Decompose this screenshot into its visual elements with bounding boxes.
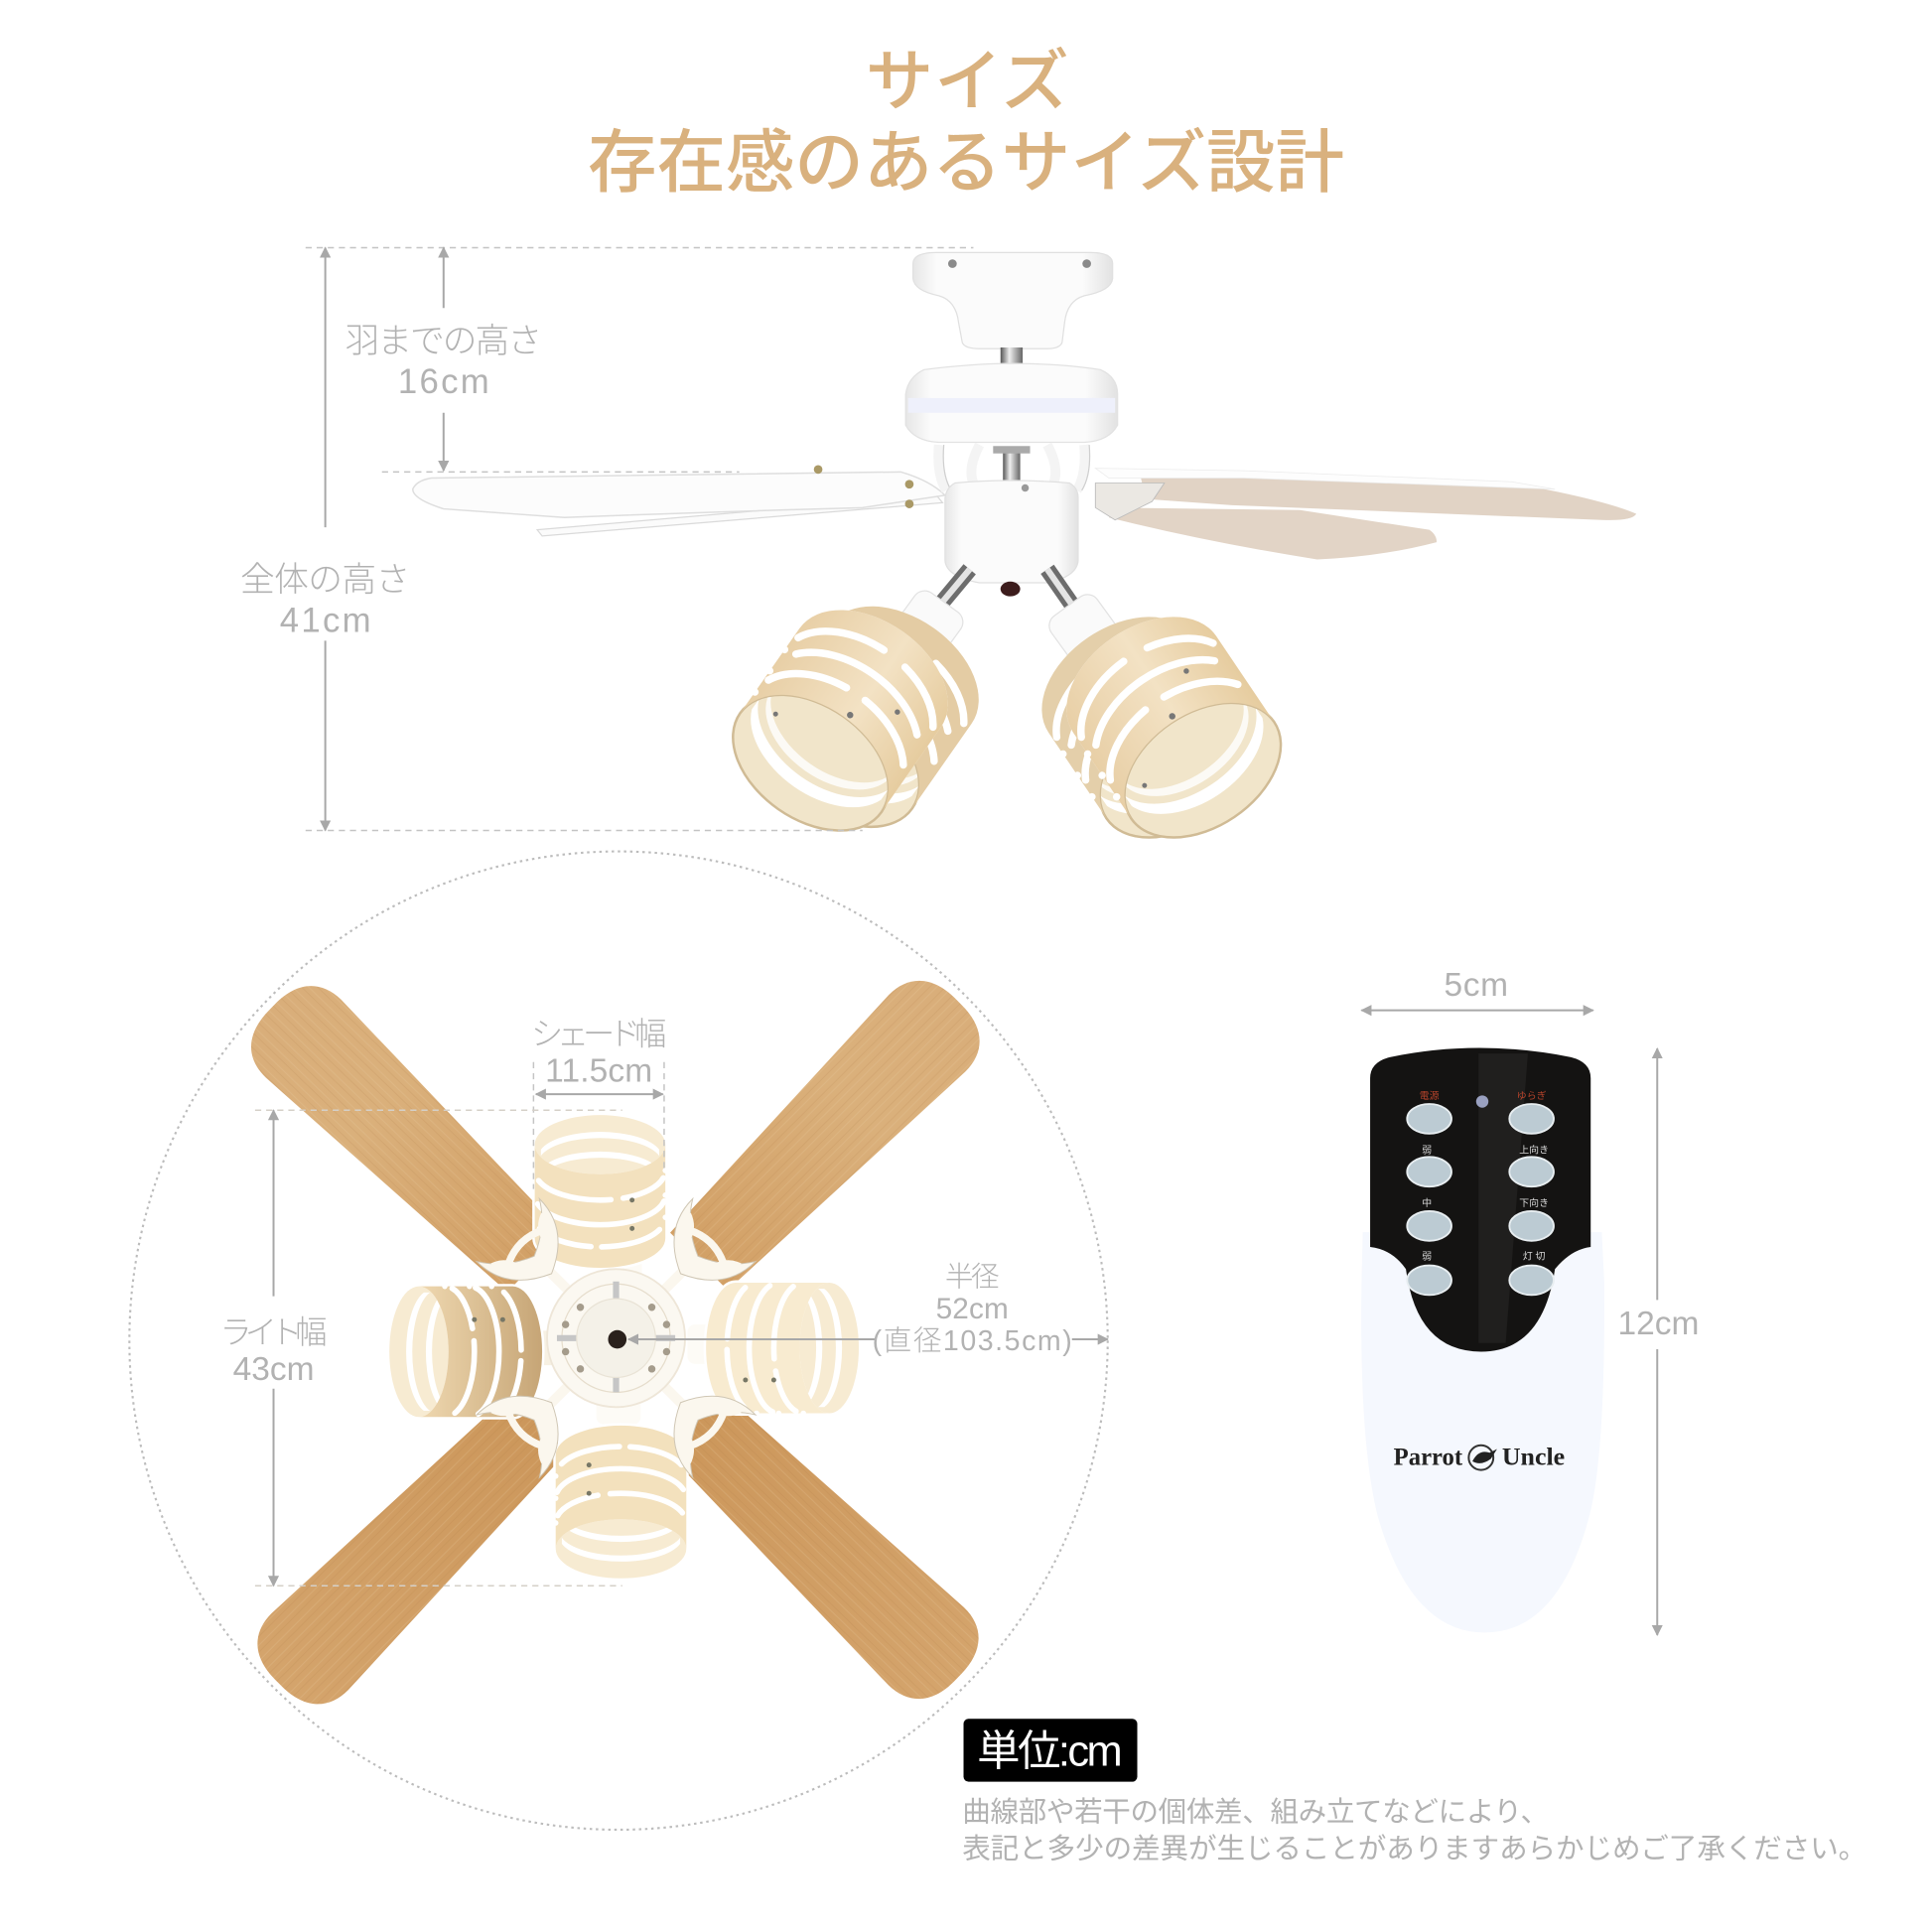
dimension: shade width: シェード幅 xyxy=(531,1016,666,1051)
remote button labels: 弱 xyxy=(1422,1145,1432,1157)
blade: left lower xyxy=(537,495,942,536)
dimension: shade width xyxy=(531,1016,666,1189)
dimension: height to blade: 羽までの高さ xyxy=(345,323,542,360)
radius circle xyxy=(129,852,1108,1830)
remote button labels xyxy=(1420,1089,1549,1262)
dimension: radius: 52cm xyxy=(936,1293,1009,1325)
hub xyxy=(547,1269,685,1407)
canopy xyxy=(913,252,1113,348)
blade irons xyxy=(1095,483,1165,520)
remote logo xyxy=(1394,1445,1565,1471)
dimension: light width xyxy=(220,1110,622,1586)
top view fan xyxy=(234,963,997,1722)
blade irons xyxy=(477,1198,604,1326)
lamp holders xyxy=(861,586,968,704)
remote button labels: 弱 xyxy=(1422,1250,1432,1262)
dimension: height to blade xyxy=(345,247,740,472)
note text: 曲線部や若干の個体差、組み立てなどにより、 xyxy=(962,1796,1549,1828)
dimension: remote width: 5cm xyxy=(1445,967,1508,1004)
dimension: radius xyxy=(628,1262,1108,1357)
red receiver xyxy=(1001,582,1021,597)
remote buttons xyxy=(1407,1104,1554,1295)
side view ceiling fan xyxy=(413,252,1636,866)
remote logo: Parrot xyxy=(1394,1445,1463,1471)
unit badge xyxy=(964,1719,1138,1782)
shade: right rear xyxy=(1017,589,1281,866)
dimension: overall height xyxy=(240,247,973,830)
dimension: shade width: 11.5cm xyxy=(545,1053,652,1090)
dimension: light width: 43cm xyxy=(233,1351,314,1388)
remote button labels: 中 xyxy=(1422,1196,1432,1209)
dimension: height to blade: 16cm xyxy=(398,363,489,401)
dimension: radius: 半径 xyxy=(945,1262,1000,1294)
chrome stem xyxy=(1001,347,1023,364)
dimension: radius: (直径103.5cm) xyxy=(873,1325,1072,1357)
title xyxy=(588,44,1344,201)
note text: 表記と多少の差異が生じることがありますあらかじめご了承ください。 xyxy=(962,1834,1866,1865)
lamp holders xyxy=(598,1254,642,1282)
blade: right upper xyxy=(1140,474,1636,520)
motor housing xyxy=(905,363,1118,443)
title: 存在感のあるサイズ設計 xyxy=(588,123,1344,201)
remote button labels: ゆらぎ xyxy=(1517,1089,1547,1102)
remote button labels: 上向き xyxy=(1519,1144,1549,1157)
remote control xyxy=(1361,1048,1604,1632)
remote button labels: 下向き xyxy=(1519,1196,1549,1209)
note text xyxy=(962,1796,1866,1865)
shade: left rear xyxy=(739,579,1004,855)
blades xyxy=(234,969,573,1302)
chrome arms xyxy=(939,569,970,607)
dimension: light width: ライト幅 xyxy=(220,1314,328,1350)
blade: right lower xyxy=(1109,507,1437,559)
remote LED xyxy=(1476,1095,1488,1108)
unit badge: 単位:cm xyxy=(977,1727,1123,1775)
light kit housing xyxy=(945,481,1078,583)
dimension: remote height: 12cm xyxy=(1618,1306,1699,1342)
remote button labels: 灯 切 xyxy=(1523,1250,1546,1262)
remote logo: Uncle xyxy=(1502,1445,1565,1471)
title: サイズ xyxy=(866,44,1069,119)
dimension: overall height: 41cm xyxy=(280,603,371,640)
remote button labels: 電源 xyxy=(1420,1089,1440,1102)
blade: left upper white xyxy=(413,472,945,517)
remote black panel xyxy=(1370,1048,1590,1351)
remote body xyxy=(1361,1232,1604,1632)
shade: left front xyxy=(708,582,973,859)
shades xyxy=(535,1115,665,1268)
dimension: overall height: 全体の高さ xyxy=(240,562,410,600)
shade: right front xyxy=(1041,589,1306,866)
arms and motor bottom xyxy=(938,445,1085,490)
